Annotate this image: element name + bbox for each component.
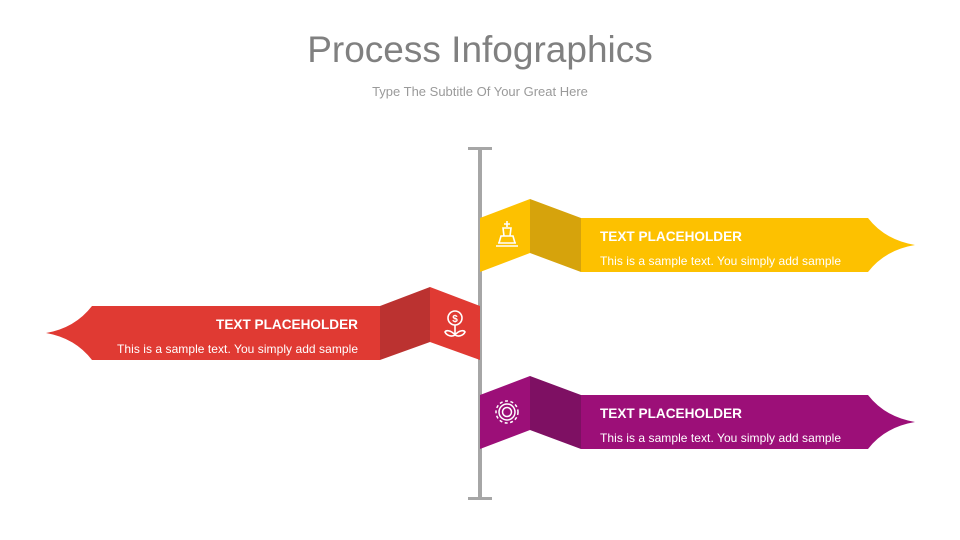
banner: yellow — [480, 199, 915, 272]
heading yellow: TEXT PLACEHOLDER — [600, 229, 742, 244]
banner: purple — [480, 376, 915, 449]
icon: money plant — [445, 311, 465, 336]
icon: money plant: $ — [452, 314, 458, 325]
body yellow: This is a sample text. You simply add sample — [600, 254, 841, 268]
subtitle: Type The Subtitle Of Your Great Here — [372, 84, 588, 99]
body red: This is a sample text. You simply add sample — [117, 342, 358, 356]
icon: chess king — [496, 221, 518, 246]
vertical pole — [468, 147, 492, 500]
heading purple: TEXT PLACEHOLDER — [600, 406, 742, 421]
body purple: This is a sample text. You simply add sample — [600, 431, 841, 445]
title: Process Infographics — [307, 29, 653, 70]
heading red: TEXT PLACEHOLDER — [216, 317, 358, 332]
banner: red — [46, 287, 480, 360]
icon: gear wrench — [496, 401, 518, 423]
